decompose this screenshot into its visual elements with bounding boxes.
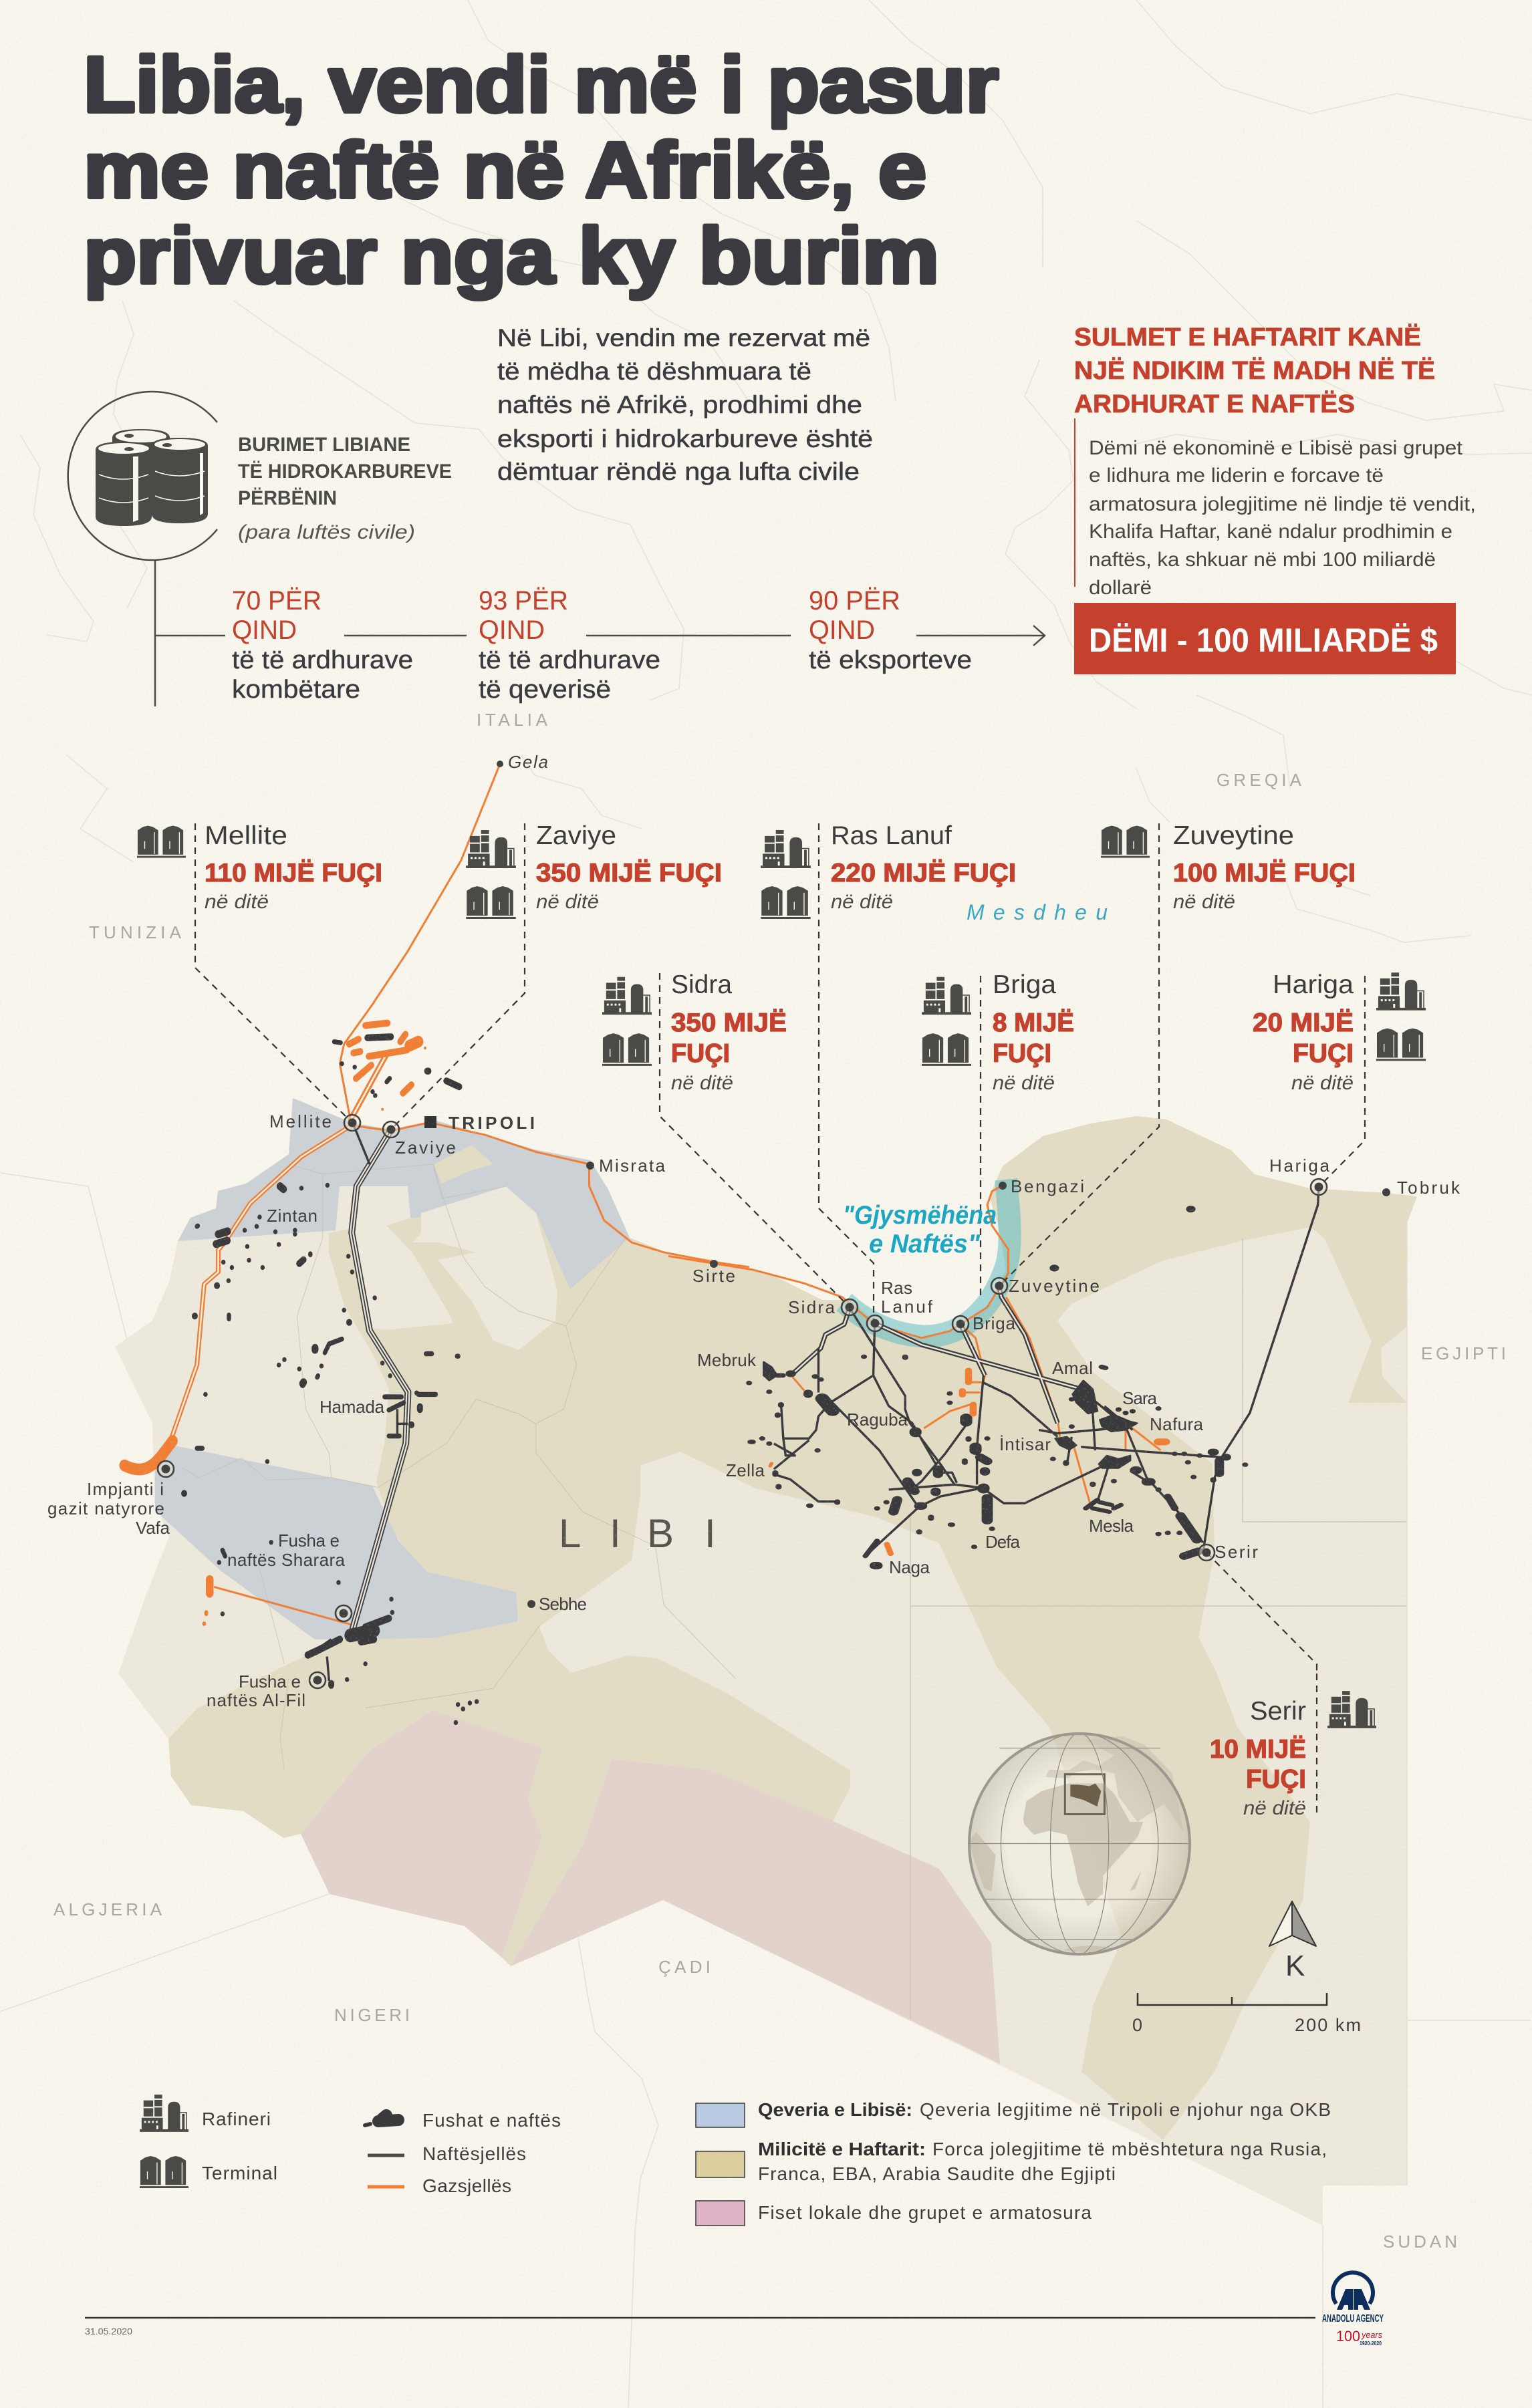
text block: damage explanation: Dëmi në ekonominë e Libisë pasi grupet <box>1089 437 1463 459</box>
text block: damage explanation <box>1075 418 1476 599</box>
map zone: Libya base territory <box>115 1098 1417 2226</box>
text: country labels: ALGJERIA <box>53 1899 162 1919</box>
stat: 93 percent government income: QIND <box>479 616 545 645</box>
callout: damage 100 billion dollars: DËMI - 100 MILIARDË $ <box>1089 622 1438 659</box>
map place labels: Mellite <box>269 1111 332 1131</box>
map place labels: Sirte <box>692 1266 735 1286</box>
callout: Sidra: FUÇI <box>671 1039 730 1068</box>
logo: Anadolu Agency: 100 <box>1336 2328 1360 2345</box>
callout: Sidra: në ditë <box>671 1072 733 1094</box>
text: country labels: EGJIPTI <box>1421 1343 1506 1363</box>
stat: 93 percent government income <box>479 586 660 704</box>
map zone: local tribes and armed groups east <box>511 1759 1000 2064</box>
callout: Zuveytine: 100 MIJË FUÇI <box>1173 859 1356 888</box>
gas pipelines east <box>668 1184 1161 1505</box>
legend: facility and pipeline symbols: Terminal <box>202 2163 277 2183</box>
map place labels: Misrata <box>599 1156 666 1176</box>
map place labels: Sara <box>1122 1388 1158 1408</box>
stat: 90 percent exports: QIND <box>809 616 875 645</box>
callout: Mellite: Mellite <box>205 821 287 850</box>
callout: Zuveytine: në ditë <box>1173 891 1235 913</box>
callout: Briga <box>922 970 1074 1094</box>
logo: Anadolu Agency: 1920-2020 <box>1360 2340 1382 2347</box>
callout: Briga: 8 MIJË <box>993 1009 1074 1037</box>
map place labels: Naga <box>889 1557 930 1577</box>
text block: damage explanation: armatosura jolegjitime në lindje të vendit, <box>1089 493 1476 515</box>
callout: Sidra: 350 MIJË <box>671 1009 787 1037</box>
stat: 70 percent national income: 70 PËR <box>232 586 322 616</box>
text block: introduction: të mëdha të dëshmuara të <box>497 358 811 385</box>
text block: damage explanation: e lidhura me liderin e forcave të <box>1089 464 1384 487</box>
callout: Serir: FUÇI <box>1246 1765 1306 1794</box>
oil fields east <box>749 1209 1245 1566</box>
callout: Hariga: Hariga <box>1273 970 1354 999</box>
map place labels: Hamada <box>320 1397 385 1417</box>
arrow: connector line through statistics <box>155 560 1045 706</box>
heading: main title: Libia, vendi më i pasur <box>84 41 999 129</box>
stat: 70 percent national income: kombëtare <box>232 676 360 704</box>
map place labels: Fusha e <box>239 1671 301 1692</box>
callout: Ras Lanuf: në ditë <box>831 891 893 913</box>
text: country labels: TUNIZIA <box>89 922 182 942</box>
callout: Serir: në ditë <box>1243 1797 1306 1819</box>
map place labels: Zintan <box>267 1206 317 1226</box>
callout: Hariga: FUÇI <box>1293 1039 1354 1068</box>
map place labels: naftës Sharara <box>227 1550 346 1570</box>
stat: 90 percent exports: 90 PËR <box>809 586 900 616</box>
legend: control zones: Milicitë e Haftarit: <box>758 2139 926 2159</box>
callout: Ras Lanuf <box>761 821 1016 919</box>
map markers <box>158 761 1390 1688</box>
text: Oil Crescent label: e Naftës" <box>869 1230 980 1258</box>
callout: Zuveytine: Zuveytine <box>1173 821 1294 850</box>
callout: Zaviye <box>466 821 722 919</box>
legend: facility and pipeline symbols: Naftësjellës <box>422 2143 526 2164</box>
map place labels: Fusha e <box>278 1530 340 1551</box>
footer rule and date: 31.05.2020 <box>85 2326 132 2336</box>
text block: hydrocarbon resources heading: TË HIDROKARBUREVE <box>238 460 452 483</box>
text block: introduction: Në Libi, vendin me rezervat më <box>497 324 870 352</box>
legend: control zones: Qeveria e Libisë: <box>758 2099 912 2120</box>
oil pipelines west <box>310 1123 408 1681</box>
callout: Hariga: në ditë <box>1291 1072 1354 1094</box>
map place labels: TRIPOLI <box>449 1113 536 1133</box>
text block: damage explanation: dollarë <box>1089 577 1152 599</box>
text: Mediterranean label: Mesdheu <box>967 900 1108 924</box>
map place labels: Lanuf <box>881 1297 933 1317</box>
callout: Zaviye: 350 MIJË FUÇI <box>536 859 722 888</box>
map place labels: Bengazi <box>1011 1176 1084 1196</box>
map place labels: LIBI <box>559 1511 716 1556</box>
legend: facility and pipeline symbols: Fushat e naftës <box>422 2110 561 2131</box>
map zone: Government of Libya southwest <box>155 1446 518 1639</box>
stat: 70 percent national income: të të ardhurave <box>232 646 413 674</box>
panel: Libya map with control zones <box>0 752 1531 2408</box>
text block: hydrocarbon resources heading: (para luftës civile) <box>238 521 415 543</box>
callout: Briga: FUÇI <box>993 1039 1051 1068</box>
map zone: local tribes and armed groups west <box>301 1710 542 1958</box>
Oil Crescent highlight <box>844 1180 1010 1336</box>
scale bar <box>1132 1993 1361 2035</box>
callout: Briga: Briga <box>993 970 1056 999</box>
map place labels: Amal <box>1052 1358 1093 1378</box>
text block: damage explanation: Khalifa Haftar, kanë ndalur prodhimin e <box>1089 521 1452 543</box>
gas fields east <box>770 1370 1166 1554</box>
map place labels: Zuveytine <box>1009 1276 1100 1296</box>
heading: Haftar attacks impact: NJË NDIKIM TË MADH NË TË <box>1074 356 1435 385</box>
icon: oil barrels in ring <box>68 392 217 560</box>
text block: hydrocarbon resources heading <box>238 434 452 543</box>
callout: Mellite: 110 MIJË FUÇI <box>205 859 382 888</box>
legend: control zones: Fiset lokale dhe grupet e armatosura <box>758 2202 1092 2223</box>
logo: Anadolu Agency <box>1322 2272 1384 2347</box>
legend: facility and pipeline symbols <box>140 2095 561 2196</box>
map place labels: Mebruk <box>697 1350 757 1370</box>
callout: Sidra: Sidra <box>671 970 732 999</box>
map zone: Government of Libya north <box>178 1098 630 1289</box>
logo: Anadolu Agency: years <box>1361 2330 1382 2340</box>
callout: Serir: 10 MIJË <box>1210 1735 1306 1764</box>
map place labels: gazit natyrore <box>47 1498 164 1518</box>
heading: Haftar attacks impact: ARDHURAT E NAFTËS <box>1074 390 1355 418</box>
callout: Briga: në ditë <box>993 1072 1055 1094</box>
stat: 93 percent government income: të të ardhurave <box>479 646 660 674</box>
gas fields west <box>124 1023 425 1623</box>
callout: Hariga: 20 MIJË <box>1253 1009 1354 1037</box>
heading: main title: privuar nga ky burim <box>84 212 939 300</box>
map place labels: Mesla <box>1089 1516 1134 1536</box>
heading: main title <box>84 41 999 300</box>
map place labels <box>47 752 1460 1710</box>
callout: Mellite <box>137 821 382 913</box>
callout: Zaviye: Zaviye <box>536 821 616 850</box>
text block: introduction: naftës në Afrikë, prodhimi dhe <box>497 391 862 418</box>
text block: hydrocarbon resources heading: PËRBËNIN <box>238 487 337 509</box>
text: country labels: ÇADI <box>658 1957 711 1977</box>
callout: Serir <box>1210 1691 1376 1819</box>
text: Oil Crescent label: "Gjysmëhëna <box>843 1201 997 1230</box>
map place labels: Sebhe <box>539 1594 587 1614</box>
icon: north arrow: K <box>1285 1950 1305 1982</box>
map place labels: Briga <box>973 1313 1016 1333</box>
text block: introduction: eksporti i hidrokarbureve është <box>497 425 873 452</box>
heading: main title: me naftë në Afrikë, e <box>84 126 926 215</box>
callout: Hariga <box>1253 970 1426 1094</box>
legend: control zones: Forca jolegjitime të mbështetura nga Rusia, <box>932 2139 1327 2159</box>
text block: introduction <box>497 324 873 485</box>
callout: Zuveytine <box>1101 821 1356 913</box>
callout: Sidra <box>602 970 787 1094</box>
map place labels: Zaviye <box>395 1138 456 1158</box>
logo: Anadolu Agency: ANADOLU AGENCY <box>1322 2313 1384 2324</box>
heading: Haftar attacks impact <box>1074 323 1435 418</box>
text block: introduction: dëmtuar rëndë nga lufta civile <box>497 458 860 485</box>
map place labels: Raguba <box>847 1410 908 1430</box>
icon: north arrow <box>1269 1901 1316 1982</box>
callout: Mellite: në ditë <box>205 891 269 913</box>
gas pipelines west <box>171 1002 749 1625</box>
text: Oil Crescent label <box>843 1201 997 1258</box>
callout: Ras Lanuf: Ras Lanuf <box>831 821 952 850</box>
map place labels: Impjanti i <box>87 1479 164 1499</box>
map place labels: Sidra <box>788 1297 836 1317</box>
legend: control zones: Franca, EBA, Arabia Saudite dhe Egjipti <box>758 2163 1116 2184</box>
callout: Ras Lanuf: 220 MIJË FUÇI <box>831 859 1016 888</box>
stat: 93 percent government income: 93 PËR <box>479 586 568 616</box>
legend: facility and pipeline symbols: Gazsjellës <box>422 2175 511 2196</box>
callout leader lines <box>195 823 1365 1814</box>
text: country labels: NIGERI <box>334 2005 410 2025</box>
map place labels: Serir <box>1215 1542 1258 1562</box>
legend: facility and pipeline symbols: Rafineri <box>202 2109 271 2129</box>
legend: control zones <box>696 2099 1331 2226</box>
callout: Zaviye: në ditë <box>536 891 599 913</box>
map place labels: Gela <box>508 752 548 772</box>
oil fields west <box>184 1037 477 1723</box>
scale bar: 0 <box>1132 2015 1142 2035</box>
map place labels: Nafura <box>1150 1414 1204 1434</box>
text: country labels: ITALIA <box>477 710 548 730</box>
map place labels: Ras <box>881 1278 912 1298</box>
legend: control zones: Qeveria legjitime në Tripoli e njohur nga OKB <box>920 2099 1331 2120</box>
callout: Serir: Serir <box>1250 1697 1306 1726</box>
text block: damage explanation: naftës, ka shkuar në mbi 100 miliardë <box>1089 549 1436 571</box>
callout: damage 100 billion dollars <box>1074 603 1456 674</box>
text block: hydrocarbon resources heading: BURIMET LIBIANE <box>238 434 410 456</box>
oil pipelines east <box>774 1187 1319 1556</box>
stat: 70 percent national income <box>232 586 413 704</box>
text: country labels: SUDAN <box>1383 2232 1457 2252</box>
stat: 90 percent exports: të eksporteve <box>809 646 972 674</box>
globe inset <box>969 1733 1190 1955</box>
map place labels: Zella <box>726 1460 765 1480</box>
map place labels: naftës Al-Fil <box>207 1690 305 1710</box>
map place labels: Vafa <box>136 1518 170 1538</box>
map place labels: İntisar <box>999 1434 1051 1454</box>
text: country labels <box>53 710 1506 2252</box>
text: country labels: GREQIA <box>1217 770 1302 790</box>
map place labels: Hariga <box>1269 1156 1330 1176</box>
stat: 90 percent exports <box>809 586 972 674</box>
map zone: Haftar controlled territory <box>168 1116 1417 2140</box>
map place labels: Tobruk <box>1397 1178 1460 1198</box>
scale bar: 200 km <box>1295 2015 1361 2035</box>
stat: 93 percent government income: të qeverisë <box>479 676 611 704</box>
heading: Haftar attacks impact: SULMET E HAFTARIT KANË <box>1074 323 1421 352</box>
stat: 70 percent national income: QIND <box>232 616 297 645</box>
gas pipeline to Gela <box>374 764 500 1002</box>
map place labels: Defa <box>985 1532 1021 1552</box>
